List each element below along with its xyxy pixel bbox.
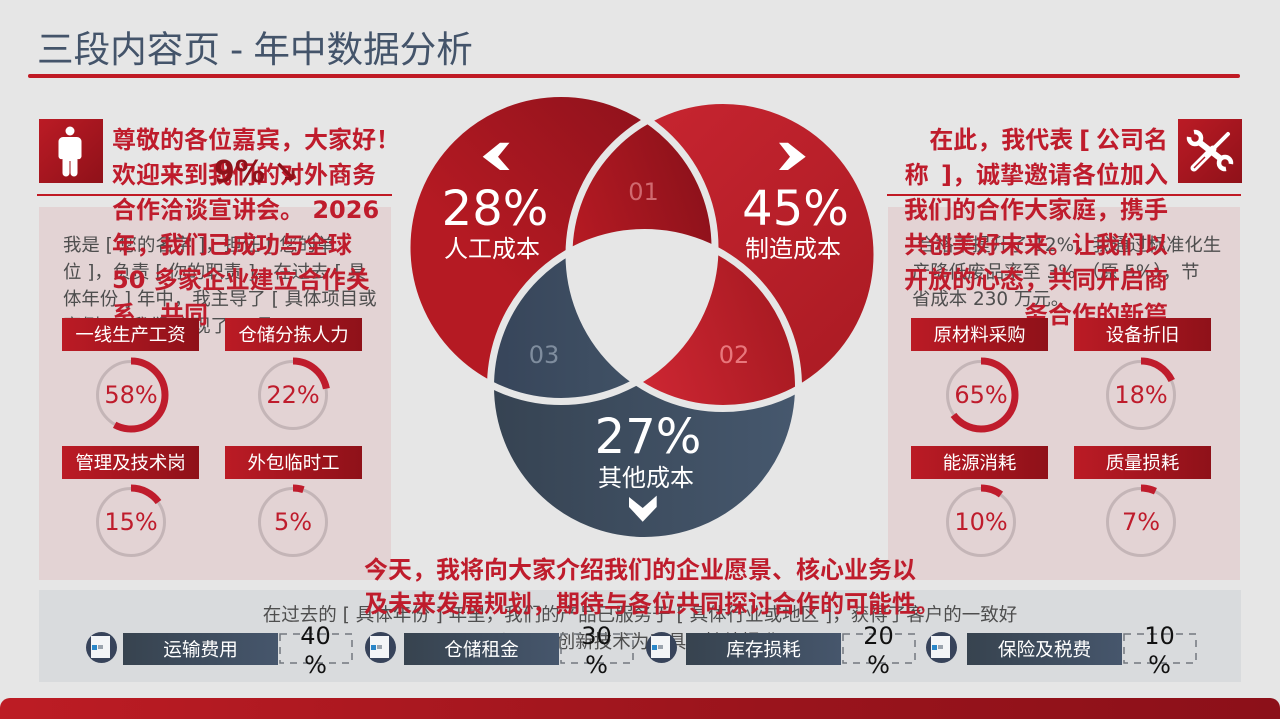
tag: energy: 能源消耗 (943, 453, 1016, 474)
title: 三段内容页 - 年中数据分析 (37, 28, 473, 71)
label 03: 03 (529, 341, 559, 369)
tag: frontline wages: 一线生产工资 (75, 325, 186, 346)
donut 65%: 65% (954, 381, 1008, 409)
panel: left background (39, 207, 391, 580)
tag: outsourced (225, 446, 362, 479)
donut 58%: 58% (104, 381, 158, 409)
label 01: 01 (628, 178, 659, 206)
tag: management: 管理及技术岗 (75, 453, 186, 474)
item: transport cost: 运输费用 (163, 640, 238, 661)
text block: right body: 产降低废品率至 3% （原 5%），节 (912, 262, 1199, 283)
center void (572, 236, 712, 378)
tag: outsourced: 外包临时工 (248, 453, 339, 474)
label 02: 02 (719, 341, 749, 369)
text block: left red greeting: 50 多家企业建立合作关 (112, 266, 370, 294)
chart: donut rings (96, 358, 1176, 557)
item: transport cost (86, 622, 353, 679)
circle outlines (407, 94, 877, 540)
icon: right chevron (779, 143, 806, 170)
text block: left body: 体年份 ] 年中，我主导了 [ 具体项目或 (63, 289, 377, 310)
text block: left body (63, 235, 377, 337)
text block: center red intro: 及未来发展规划，期待与各位共同探讨合作的可能性。 (364, 590, 940, 618)
item: insurance and tax: 保险及税费 (998, 640, 1091, 661)
text block: right red invitation (904, 126, 1168, 329)
text block: center red intro: 今天，我将向大家介绍我们的企业愿景、核心业务以 (364, 556, 916, 584)
right divider (887, 194, 1241, 196)
donut 18%: 18% (1114, 381, 1168, 409)
text block: left red greeting: 年，我们已成功与全球 (112, 231, 352, 259)
text block: right red invitation: 在此，我代表 [ 公司名 (929, 126, 1168, 154)
item: warehouse rent: 30 (581, 622, 612, 650)
overlap 02 (643, 255, 795, 405)
item: insurance and tax: % (1148, 651, 1171, 679)
text block: left body: 位 ]，负责 [ 你的职责 ]。在过去 [ 具 (63, 262, 366, 283)
item: warehouse rent: % (585, 651, 608, 679)
bottom circle: other cost (490, 232, 798, 540)
panel: bottom background (39, 590, 1241, 682)
text block: right red invitation: 开放的心态，共同开启商 (904, 266, 1168, 294)
text block: center red intro (364, 556, 940, 618)
text block: right red invitation: 称 ]，诚挚邀请各位加入 (905, 161, 1168, 189)
text block: left body: 案例 ]，我们 实现了 1 项 (63, 316, 271, 337)
text block: right body: 省成本 230 万元。 (912, 289, 1069, 310)
item: transport cost: % (304, 651, 327, 679)
item: warehouse rent: 仓储租金 (444, 640, 519, 661)
text block: left body: 我是 [ 您的名字 ]，担任 [ 您的单 (63, 235, 334, 256)
donut 22%: 22% (266, 381, 320, 409)
donut 18% (1107, 361, 1175, 429)
label 27% other: 其他成本 (598, 464, 694, 492)
donut 22% (259, 361, 327, 429)
tag: energy (911, 446, 1048, 479)
donut 5% (259, 488, 327, 556)
tag: quality loss (1074, 446, 1211, 479)
tag: management (62, 446, 199, 479)
panel: right background (888, 207, 1240, 580)
right circle: manufacturing cost (569, 100, 877, 408)
icon: tools (1178, 119, 1242, 183)
tag: quality loss: 质量损耗 (1106, 453, 1179, 474)
label 45% manufacturing (742, 181, 849, 263)
overlap 03 (407, 94, 715, 402)
item: inventory loss: 20 (863, 622, 894, 650)
label 28% labour: 28% (442, 181, 548, 237)
footer bar (0, 698, 1280, 719)
label 45% manufacturing: 45% (742, 181, 849, 237)
tag: raw materials: 原材料采购 (934, 325, 1025, 346)
donut 7% (1107, 488, 1175, 556)
text block: left red greeting: 欢迎来到我们的对外商务 (112, 161, 376, 189)
text block: bottom body: 评。以创新技术为工具，持续提升 (501, 632, 779, 653)
tag: frontline wages (62, 318, 199, 351)
text block: left red greeting (112, 126, 400, 329)
label 28% labour: 人工成本 (444, 235, 540, 263)
chart: three-circle venn diagram (410, 97, 874, 537)
overlapping dark label: 9% ↘ (214, 155, 298, 190)
overlap 01 (573, 124, 712, 246)
title underline (28, 74, 1240, 78)
text block: bottom body: 在过去的 [ 具体年份 ] 年里，我们的产品已服务于 [ 具体行业或地区 ]，获得了客户的一致好 (263, 605, 1017, 626)
label 45% manufacturing: 制造成本 (745, 235, 841, 263)
text block: right body: 合格率提升了 12%，我通过标准化生 (917, 235, 1221, 256)
text block: left red greeting: 合作洽谈宣讲会。 2026 (112, 196, 379, 224)
label 27% other (595, 409, 701, 492)
left circle: labour cost (407, 94, 715, 402)
text block: right body (912, 235, 1221, 310)
text block: left red greeting: 尊敬的各位嘉宾，大家好！ (112, 126, 400, 154)
donut 58% (97, 361, 165, 429)
text block: right red invitation: 务合作的新篇 (1024, 301, 1168, 329)
icon: left chevron (483, 143, 510, 170)
donut 65% (947, 361, 1015, 429)
item: insurance and tax: 10 (1144, 622, 1175, 650)
donut 15%: 15% (104, 508, 158, 536)
item: inventory loss (646, 622, 916, 679)
tag: raw materials (911, 318, 1048, 351)
donut 10%: 10% (954, 508, 1008, 536)
tag: warehouse labour: 仓储分拣人力 (238, 325, 349, 346)
label 28% labour (442, 181, 548, 263)
tag: depreciation (1074, 318, 1211, 351)
item: inventory loss: % (867, 651, 890, 679)
text block: left red greeting: 系，共同 (112, 301, 208, 329)
icon: person (39, 119, 103, 183)
left divider (37, 194, 392, 196)
item: warehouse rent (365, 622, 634, 679)
donut 10% (947, 488, 1015, 556)
item: inventory loss: 库存损耗 (726, 640, 801, 661)
text block: bottom body (263, 604, 1017, 653)
icon: down chevron (629, 496, 657, 522)
donut 5%: 5% (274, 508, 312, 536)
tag: depreciation: 设备折旧 (1106, 325, 1179, 346)
item: transport cost: 40 (300, 622, 331, 650)
text block: right red invitation: 共创美好未来。让我们以 (904, 231, 1168, 259)
donut 15% (97, 488, 165, 556)
donut 7%: 7% (1122, 508, 1160, 536)
tag: warehouse labour (225, 318, 362, 351)
label 27% other: 27% (595, 409, 701, 465)
text block: right red invitation: 我们的合作大家庭，携手 (904, 196, 1168, 224)
